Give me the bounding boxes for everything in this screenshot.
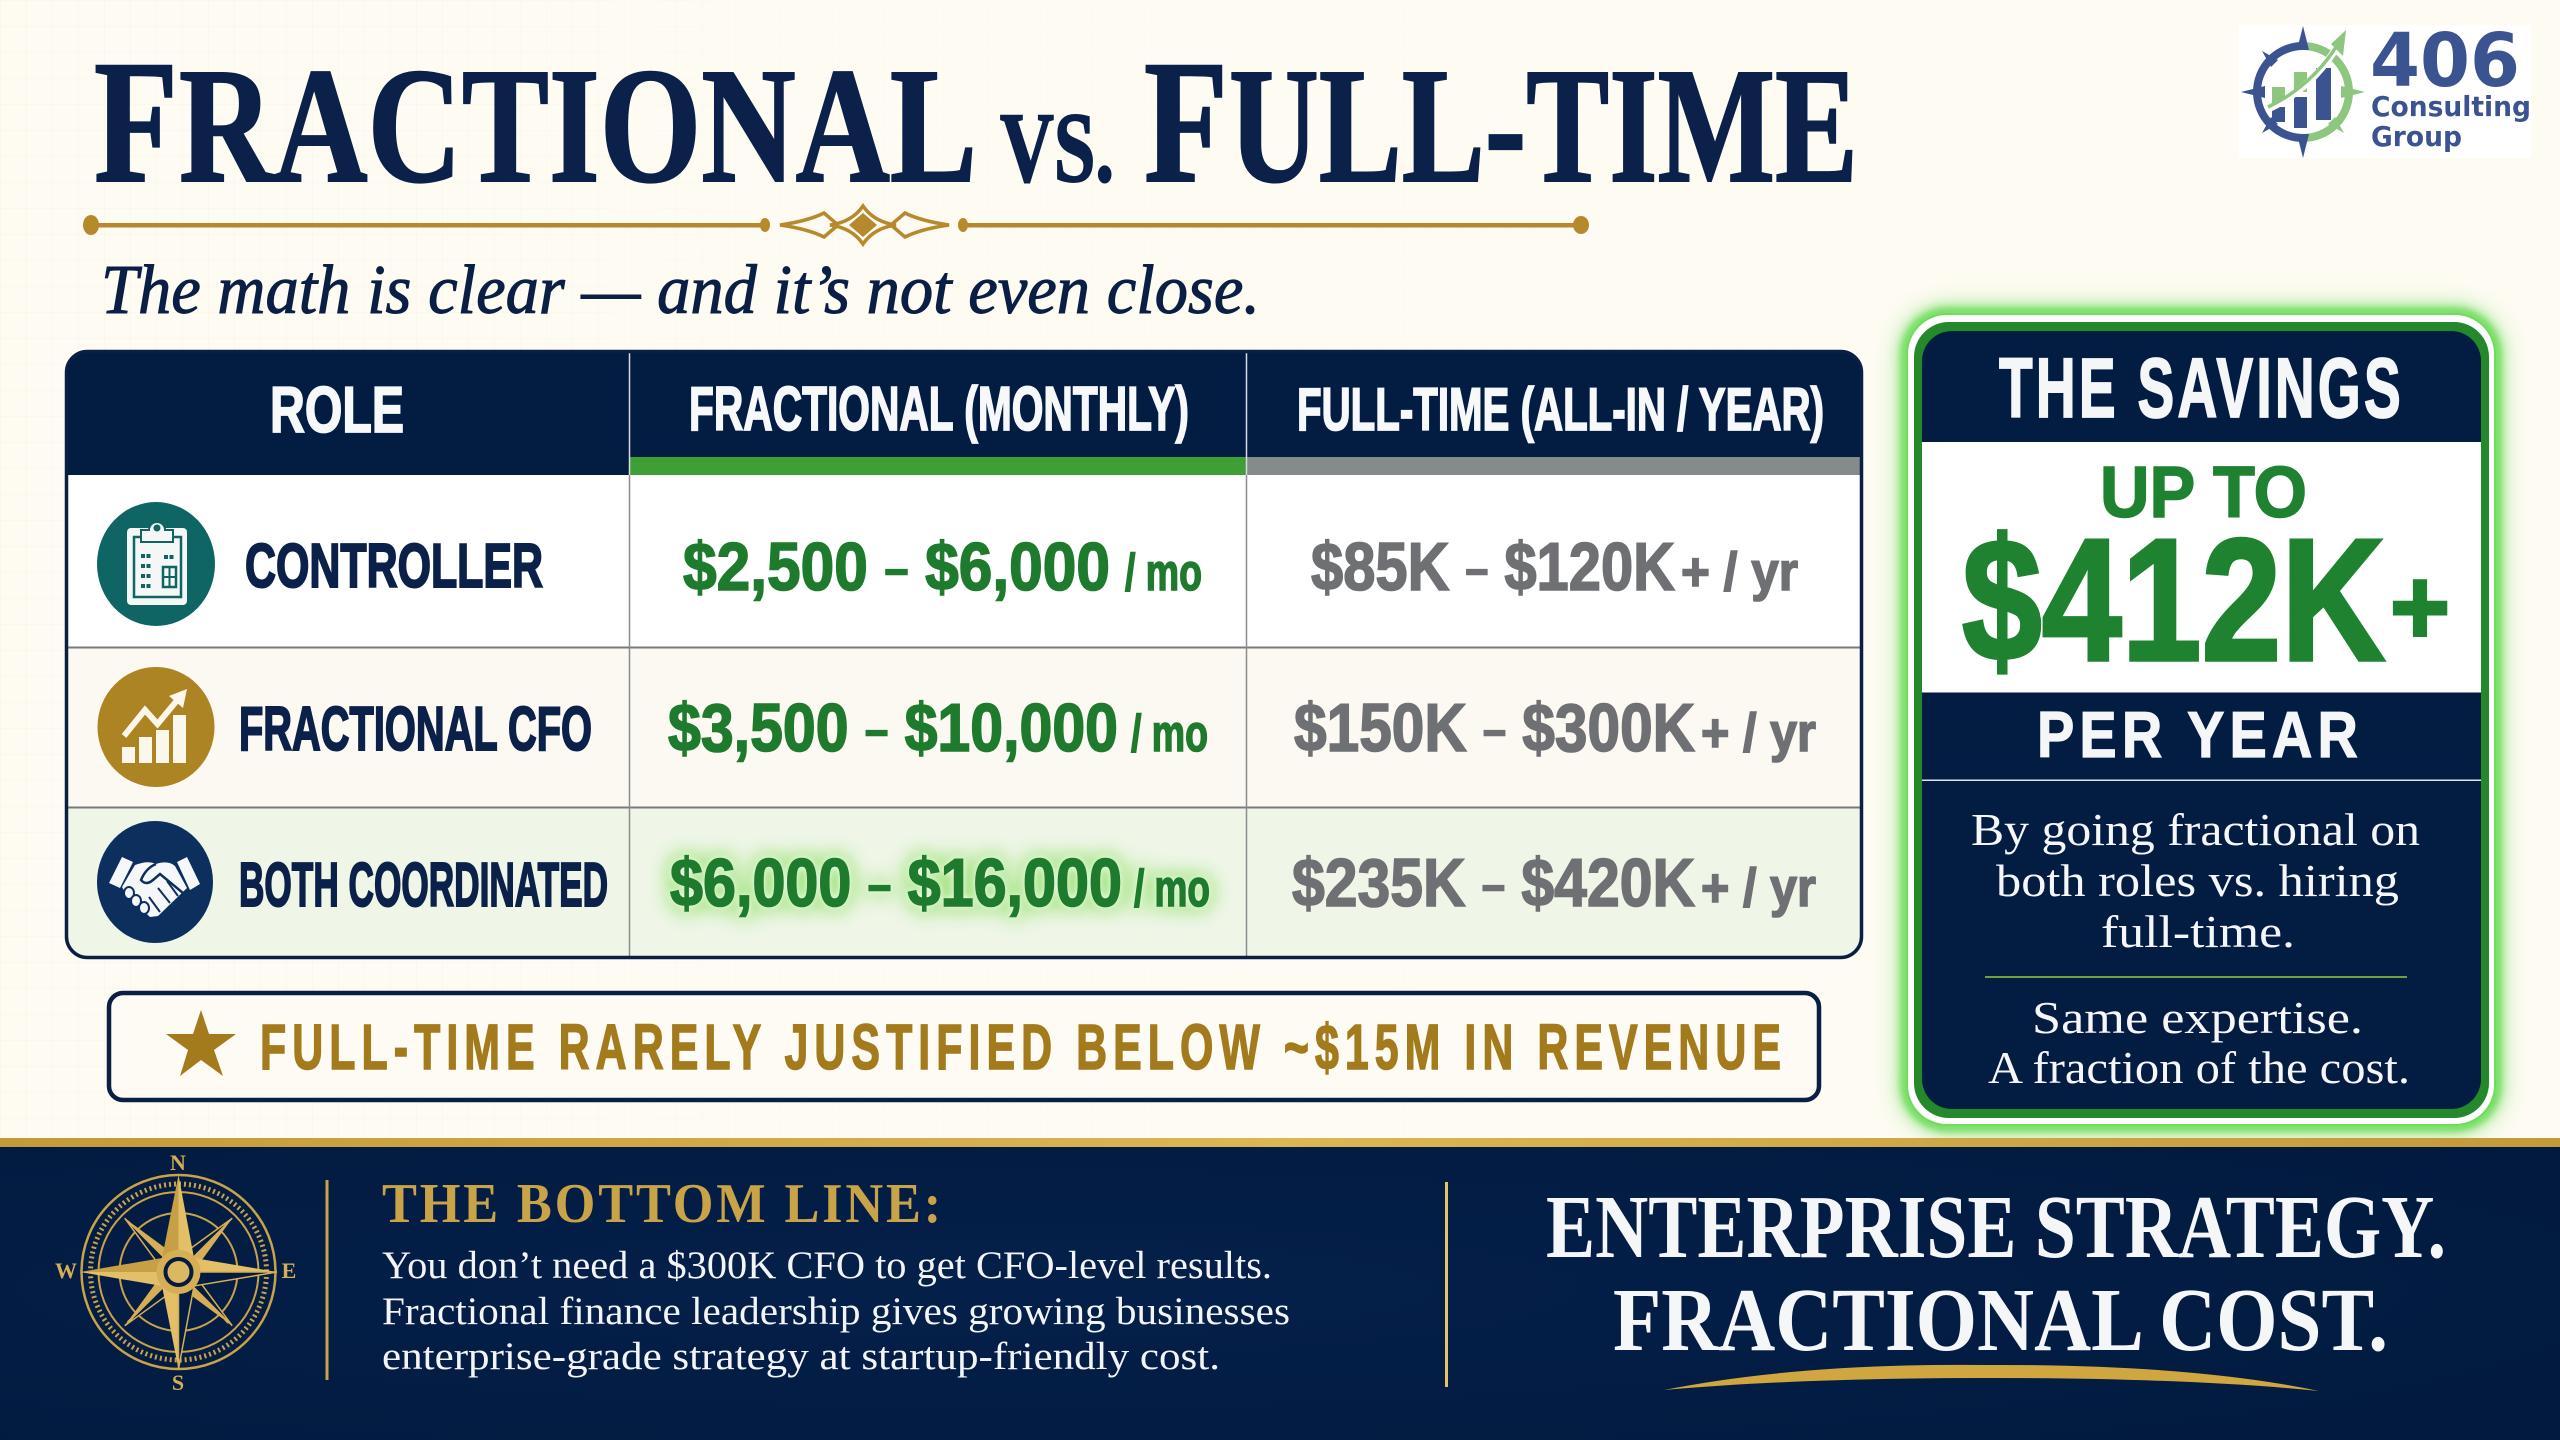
table header: FULL-TIME (ALL-IN / YEAR) bbox=[1297, 376, 1824, 443]
price: fractional, glowing: – bbox=[868, 859, 891, 912]
logo: 406 Consulting Group: Consulting bbox=[2371, 90, 2531, 123]
background bbox=[0, 0, 217, 1138]
price: full-time: – bbox=[1483, 704, 1506, 757]
bottom line text: THE BOTTOM LINE: bbox=[382, 1173, 944, 1235]
price: fractional, glowing: / mo bbox=[1134, 860, 1210, 918]
price: fractional bbox=[668, 690, 1208, 766]
bottom line text: Fractional finance leadership gives growing businesses bbox=[382, 1290, 1290, 1333]
price: full-time: – bbox=[1466, 543, 1488, 596]
title: F bbox=[94, 25, 178, 220]
title: ULL-TIME bbox=[1229, 34, 1858, 217]
price: fractional: / mo bbox=[1131, 705, 1208, 763]
price: full-time: – bbox=[1482, 859, 1505, 912]
savings description: By going fractional on bbox=[1971, 804, 2420, 855]
price: full-time: $85K bbox=[1311, 529, 1474, 605]
price: fractional, glowing: $16,000 bbox=[891, 845, 1122, 921]
bottom line text: enterprise-grade strategy at startup-friendly cost. bbox=[382, 1335, 1220, 1378]
icon: compass rose: E bbox=[282, 1258, 296, 1283]
price: fractional: $2,500 bbox=[683, 529, 891, 605]
icon: clipboard bbox=[97, 502, 215, 626]
title: VS. bbox=[1000, 92, 1114, 203]
price: fractional, glowing: $6,000 bbox=[670, 845, 878, 921]
savings amount: + bbox=[2390, 546, 2450, 667]
price: fractional: $6,000 bbox=[908, 529, 1110, 605]
price: fractional, glowing bbox=[670, 845, 1210, 921]
savings description: Same expertise. bbox=[2032, 992, 2363, 1043]
bottom band bbox=[0, 1138, 2560, 1440]
price: full-time: + / yr bbox=[1681, 542, 1798, 602]
price: full-time: + / yr bbox=[1701, 703, 1816, 763]
price: full-time: $420K bbox=[1505, 845, 1695, 921]
price: full-time: $120K bbox=[1488, 529, 1675, 605]
title: RACTIONAL bbox=[179, 34, 977, 217]
logo: 406 Consulting Group: 406 bbox=[2370, 18, 2520, 104]
gold swoosh bbox=[1664, 1365, 2319, 1391]
price: full-time: $150K bbox=[1294, 690, 1494, 766]
icon: handshake bbox=[97, 821, 213, 943]
icon: compass rose: S bbox=[172, 1370, 184, 1395]
price: full-time: $235K bbox=[1292, 845, 1492, 921]
row: controller bbox=[97, 502, 1798, 626]
tagline bbox=[1546, 1178, 2446, 1370]
savings description bbox=[1971, 804, 2420, 1093]
price: full-time bbox=[1311, 529, 1798, 605]
price: full-time bbox=[1292, 845, 1816, 921]
icon: compass chart bbox=[2241, 26, 2365, 158]
savings amount: UP TO bbox=[2100, 453, 2307, 533]
row: both coordinated bbox=[97, 821, 1816, 943]
table header: ROLE bbox=[270, 373, 404, 446]
savings amount: $412K bbox=[1962, 502, 2385, 697]
logo: 406 Consulting Group bbox=[2239, 18, 2531, 158]
logo: 406 Consulting Group: Group bbox=[2371, 120, 2462, 153]
row: controller: CONTROLLER bbox=[245, 532, 543, 601]
savings description: full-time. bbox=[2101, 906, 2295, 957]
price: fractional: – bbox=[885, 543, 908, 596]
price: full-time bbox=[1294, 690, 1816, 766]
icon: compass rose: W bbox=[55, 1258, 77, 1283]
table header: FRACTIONAL (MONTHLY) bbox=[689, 375, 1189, 444]
price: full-time: $300K bbox=[1506, 690, 1695, 766]
subtitle: The math is clear — and it’s not even close. bbox=[101, 252, 1260, 329]
row: both coordinated: BOTH COORDINATED bbox=[239, 851, 608, 920]
panel: the savings bbox=[1905, 312, 2497, 1127]
callout: revenue threshold: FULL-TIME RARELY JUSTIFIED BELOW ~$15M IN REVENUE bbox=[260, 1011, 1787, 1083]
title: F bbox=[1144, 25, 1228, 220]
callout: revenue threshold bbox=[109, 993, 1819, 1100]
per year: PER YEAR bbox=[2037, 698, 2363, 771]
bottom line text: You don’t need a $300K CFO to get CFO-level results. bbox=[382, 1244, 1272, 1287]
row: fractional cfo: FRACTIONAL CFO bbox=[239, 695, 592, 764]
price: fractional: / mo bbox=[1125, 544, 1202, 602]
icon: star bbox=[166, 1010, 236, 1076]
icon: growth chart bbox=[98, 667, 214, 787]
row: fractional cfo bbox=[98, 667, 1816, 787]
icon: compass rose: N bbox=[170, 1150, 186, 1175]
price: fractional bbox=[683, 529, 1202, 605]
price: fractional: $3,500 bbox=[668, 690, 876, 766]
price: fractional: – bbox=[865, 704, 888, 757]
icon: compass rose bbox=[55, 1150, 296, 1395]
savings description: both roles vs. hiring bbox=[1996, 855, 2399, 906]
tagline: FRACTIONAL COST. bbox=[1613, 1271, 2388, 1370]
savings description: A fraction of the cost. bbox=[1988, 1042, 2410, 1093]
comparison table bbox=[65, 350, 1863, 959]
bottom line text bbox=[382, 1173, 1290, 1378]
title bbox=[94, 25, 1858, 220]
table header bbox=[270, 373, 1824, 446]
price: fractional: $10,000 bbox=[888, 690, 1118, 766]
ornamental rule bbox=[83, 206, 1589, 244]
price: full-time: + / yr bbox=[1701, 858, 1816, 918]
table body backgrounds bbox=[65, 350, 1863, 959]
